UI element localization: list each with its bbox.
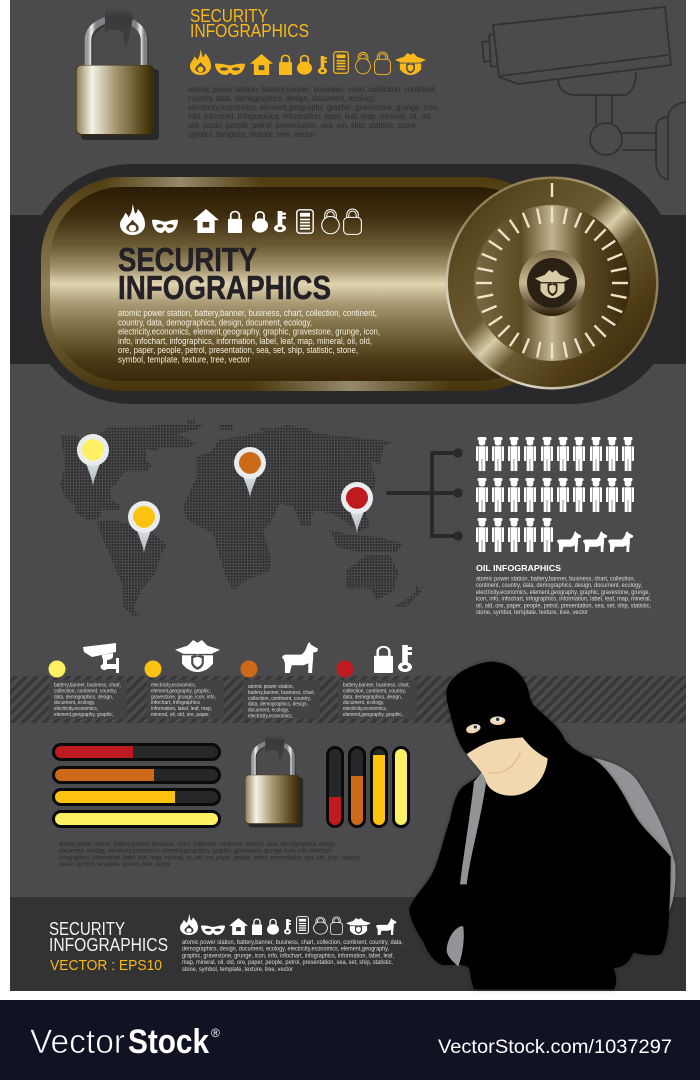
- icon: security camera outline: [482, 7, 686, 180]
- hero body text: [118, 308, 380, 364]
- eyes: [465, 716, 505, 735]
- hero title: [118, 241, 331, 306]
- face: [467, 737, 548, 796]
- thief figure: [409, 662, 675, 989]
- hero metallic rim: [41, 177, 561, 391]
- map pin: red: [341, 482, 373, 533]
- category 4: lock and key: document, ecology,: [343, 700, 384, 706]
- vertical progress bars: [326, 746, 410, 828]
- middle body text: infographics, information, label, leaf, map, mineral, oil, old, ore, paper, people, petrol, presentation, sea, set, ship, statistic,: [59, 854, 361, 861]
- hero body text: ore, paper, people, petrol, presentation, sea, set, ship, statistic, stone,: [118, 345, 358, 355]
- middle body text: atomic power station, battery,banner, business, chart, collection, continent, country, data, demographics, design,: [59, 841, 337, 848]
- oil infographics text block: electricity,economics, element,geography, graphic, gravestone, grunge,: [476, 589, 650, 596]
- striped band: [10, 676, 686, 723]
- bottom body text: [182, 939, 403, 973]
- category 3: dog: [240, 642, 320, 720]
- top body text: ore, paper, people, petrol, presentation, sea, set, ship, statistic, stone,: [188, 120, 418, 130]
- bottom icon row: [180, 914, 396, 935]
- oil infographics text block: stone, symbol, template, texture, tree, vector: [476, 609, 588, 616]
- hero metallic face: [50, 187, 550, 381]
- category 1: camera: electricity,economics,: [54, 706, 98, 712]
- category 3: dog: atomic power station,: [248, 684, 294, 690]
- category 4: lock and key: electricity,economics,: [343, 706, 387, 712]
- footer logo: Stock: [128, 1023, 209, 1061]
- horizontal progress bars: [52, 743, 221, 828]
- bottom heading: INFOGRAPHICS: [49, 935, 168, 955]
- combination dial: [446, 176, 658, 390]
- category 1: camera: document, ecology,: [54, 700, 95, 706]
- top icon row: [190, 49, 426, 75]
- padlock top: [76, 1, 159, 140]
- black silhouette: [409, 662, 671, 989]
- dark band behind hero: [10, 215, 686, 364]
- category 2: police cap: [144, 640, 224, 719]
- footer logo: [30, 1023, 220, 1061]
- oil infographics text block: continent, country, data, demographics, design, document, ecology,: [476, 582, 642, 589]
- top heading: [190, 6, 309, 41]
- category 2: police cap: electricity,economics,: [151, 682, 196, 688]
- category 2: police cap: information, label, leaf, map,: [151, 706, 212, 712]
- category 2: police cap: gravestone, grunge, icon, info,: [151, 694, 216, 700]
- map pin: amber: [128, 501, 160, 553]
- oil infographics text block: OIL INFOGRAPHICS: [476, 563, 561, 573]
- top body text: country, data, demographics, design, document, ecology,: [188, 93, 376, 103]
- top heading: INFOGRAPHICS: [190, 21, 309, 41]
- bottom body text: atomic power station, battery,banner, business, chart, collection, continent, country, data,: [182, 939, 403, 946]
- footer logo: ®: [211, 1026, 220, 1040]
- hero body text: atomic power station, battery,banner, business, chart, collection, continent,: [118, 308, 377, 318]
- world map dots: [60, 420, 422, 617]
- oil infographics text block: [476, 563, 651, 616]
- category 3: dog: data, demographics, design,: [248, 702, 308, 708]
- category 1: camera: collection, continent, country,: [54, 688, 117, 694]
- category 3: dog: battery,banner, business, chart,: [248, 690, 315, 696]
- map pin: yellow: [77, 434, 109, 486]
- middle body text: document, ecology, electricity,economics, element,geography, graphic, gravestone, grunge, icon, info, infochart,: [59, 848, 333, 855]
- hero body text: electricity,economics, element,geography, graphic, gravestone, grunge, icon,: [118, 327, 380, 337]
- hero title: SECURITY: [118, 241, 257, 278]
- hero body text: country, data, demographics, design, document, ecology,: [118, 317, 312, 327]
- bottom body text: map, mineral, oil, old, ore, paper, people, petrol, presentation, sea, set, ship, statistic,: [182, 959, 393, 966]
- bottom heading: [49, 919, 168, 974]
- category 4: lock and key: element,geography, graphic,: [343, 712, 403, 718]
- strap: [460, 771, 486, 884]
- connector tree: [388, 448, 463, 541]
- oil infographics text block: oil, old, ore, paper, people, petrol, presentation, sea, set, ship, statistic,: [476, 602, 651, 609]
- cloth: [447, 926, 464, 967]
- top body text: symbol, template, texture, tree, vector: [188, 129, 315, 139]
- top body text: [188, 84, 439, 139]
- backpack: [585, 756, 675, 913]
- category 4: lock and key: [336, 645, 417, 719]
- dial ticks: [476, 183, 628, 359]
- category 4: lock and key: collection, continent, country,: [343, 688, 406, 694]
- category 4: lock and key: data, demographics, design,: [343, 694, 402, 700]
- hero icon row: [120, 204, 361, 235]
- category 1: camera: element,geography, graphic,: [54, 712, 114, 718]
- hero title: INFOGRAPHICS: [118, 269, 331, 306]
- padlock middle: [245, 730, 303, 827]
- map pin: orange: [234, 447, 266, 498]
- category 2: police cap: mineral, oil, old, ore, paper,: [151, 712, 210, 718]
- category 3: dog: electricity,economics,: [248, 714, 293, 720]
- middle body text: stone, symbol, template, texture, tree, vector: [59, 861, 171, 868]
- category 4: lock and key: battery,banner, business, chart,: [343, 682, 410, 688]
- top body text: electricity,economics, element,geography, graphic, gravestone, grunge, icon,: [188, 102, 439, 112]
- pictogram: people and dogs: [476, 437, 634, 552]
- bottom heading: VECTOR : EPS10: [50, 957, 162, 974]
- bottom body text: demographics, design, document, ecology, electricity,economics, element,geography,: [182, 946, 389, 953]
- bottom dark band: [10, 897, 686, 991]
- category 1: camera: battery,banner, business, chart,: [54, 682, 121, 688]
- footer band: [0, 1000, 700, 1080]
- middle body text: [59, 841, 361, 868]
- footer logo: Vector: [30, 1023, 125, 1061]
- oil infographics text block: atomic power station, battery,banner, business, chart, collection,: [476, 576, 635, 582]
- hero outer dark pill: [27, 164, 676, 404]
- smile: [488, 752, 521, 773]
- category 1: camera: data, demographics, design,: [54, 694, 113, 700]
- bottom heading: SECURITY: [49, 919, 125, 939]
- hero panel: [41, 176, 658, 391]
- dial hub: [519, 250, 585, 316]
- hero body text: info, infochart, infographics, information, label, leaf, map, mineral, oil, old,: [118, 336, 372, 346]
- category 3: dog: document, ecology,: [248, 708, 289, 714]
- oil infographics text block: icon, info, infochart, infographics, information, label, leaf, map, mineral,: [476, 596, 651, 603]
- top body text: info, infochart, infographics, information, label, leaf, map, mineral, oil, old,: [188, 111, 433, 121]
- category 1: camera: [48, 643, 127, 719]
- footer reference number: VectorStock.com/1037297: [438, 1036, 672, 1058]
- category 2: police cap: element,geography, graphic,: [151, 688, 211, 694]
- hero body text: symbol, template, texture, tree, vector: [118, 354, 250, 364]
- bottom body text: graphic, gravestone, grunge, icon, info, infochart, infographics, information, label, leaf,: [182, 952, 394, 959]
- top body text: atomic power station, battery,banner, business, chart, collection, continent,: [188, 84, 437, 94]
- category 3: dog: collection, continent, country,: [248, 696, 311, 702]
- bottom body text: stone, symbol, template, texture, tree, vector: [182, 966, 294, 973]
- category 2: police cap: infochart, infographics: [151, 700, 200, 706]
- top heading: SECURITY: [190, 6, 268, 26]
